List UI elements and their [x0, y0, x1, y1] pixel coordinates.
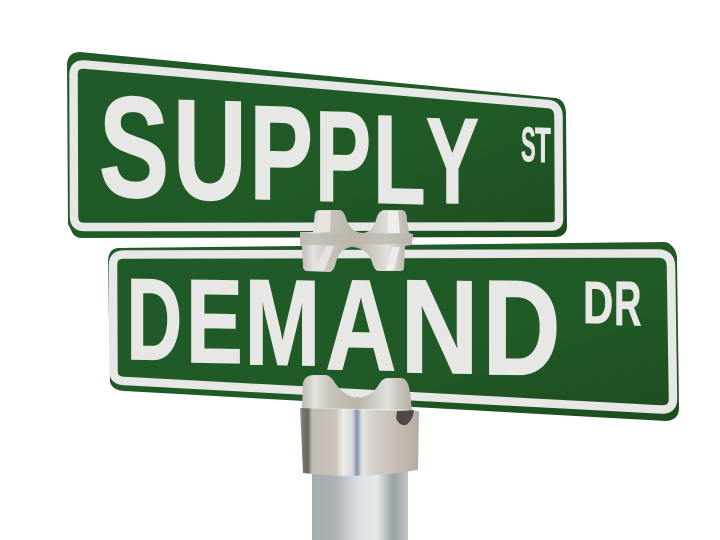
text: DEMAND: M	[244, 254, 320, 391]
sign: SUPPLY ST	[67, 52, 567, 238]
bracket connecting signs	[300, 210, 413, 272]
text: SUPPLY	[99, 65, 479, 231]
text: DEMAND: E	[186, 254, 243, 388]
text: SUPPLY: U	[173, 71, 247, 231]
text: SUPPLY: P	[250, 77, 313, 229]
text: DR: D	[583, 269, 613, 336]
text: SUPPLY: Y	[426, 92, 479, 230]
text: DEMAND: D	[482, 251, 560, 403]
text: DEMAND: N	[400, 251, 478, 402]
text: SUPPLY: L	[373, 88, 426, 231]
pole cap cylinder	[300, 408, 419, 476]
sign: DEMAND DR	[108, 242, 679, 421]
text: ST: S	[521, 118, 536, 173]
pole cap crown	[302, 375, 412, 410]
pole	[312, 470, 408, 540]
text: SUPPLY: P	[315, 84, 371, 230]
text: DEMAND	[126, 251, 560, 403]
text: DR	[583, 269, 641, 340]
text: SUPPLY: S	[99, 65, 169, 229]
text: ST: T	[535, 118, 551, 174]
text: ST	[521, 118, 551, 174]
text: DR: R	[614, 269, 641, 340]
text: DEMAND: A	[326, 253, 396, 398]
text: DEMAND: D	[126, 254, 182, 385]
